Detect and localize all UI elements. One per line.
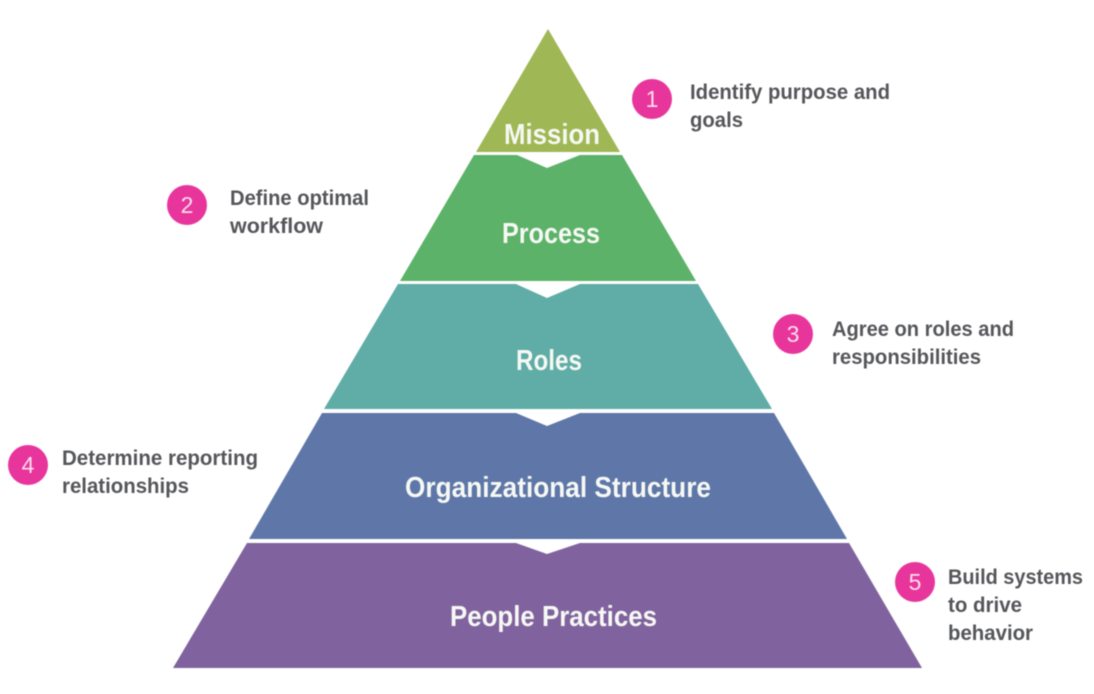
pyramid tier: Mission: Mission (504, 119, 600, 151)
pyramid tier: Roles: Roles (516, 345, 582, 377)
callout 1: Identify purpose and goals: 1 (646, 86, 658, 112)
callout 5: Build systems to drive behavior: 5 (909, 569, 921, 595)
pyramid tier: Organizational Structure: Organizational Structure (405, 472, 711, 504)
callout 5: Build systems to drive behavior: to drive (948, 594, 1022, 617)
callout 3: Agree on roles and responsibilities (773, 314, 1014, 369)
callout 2: Define optimal workflow: Define optimal (230, 187, 369, 210)
callout 3: Agree on roles and responsibilities: Agree on roles and (832, 318, 1014, 341)
callout 5: Build systems to drive behavior: Build systems (948, 566, 1083, 589)
callout 5: Build systems to drive behavior: behavior (948, 622, 1033, 645)
callout 5: Build systems to drive behavior (895, 562, 1083, 645)
pyramid tier: Organizational Structure (249, 413, 847, 539)
callout 4: Determine reporting relationships: Determine reporting (62, 447, 258, 470)
callout 4: Determine reporting relationships: relationships (62, 475, 189, 498)
callout 3: Agree on roles and responsibilities: responsibilities (832, 346, 981, 369)
pyramid tier: Process: Process (502, 218, 600, 250)
callout 4: Determine reporting relationships: 4 (22, 452, 35, 478)
callout 2: Define optimal workflow (167, 185, 369, 238)
callout 1: Identify purpose and goals: goals (690, 109, 743, 132)
callout 1: Identify purpose and goals: Identify purpose and (690, 81, 890, 104)
callout 3: Agree on roles and responsibilities: 3 (787, 321, 799, 347)
pyramid tier: People Practices: People Practices (450, 601, 657, 633)
callout 4: Determine reporting relationships (8, 445, 258, 498)
pyramid tier: Process (400, 155, 696, 281)
callout 2: Define optimal workflow: workflow (229, 215, 324, 238)
callout 2: Define optimal workflow: 2 (181, 192, 193, 218)
pyramid tier: Roles (324, 284, 772, 409)
pyramid tier: Mission (476, 29, 620, 152)
pyramid tier: People Practices (173, 543, 922, 668)
callout 1: Identify purpose and goals (632, 79, 890, 132)
